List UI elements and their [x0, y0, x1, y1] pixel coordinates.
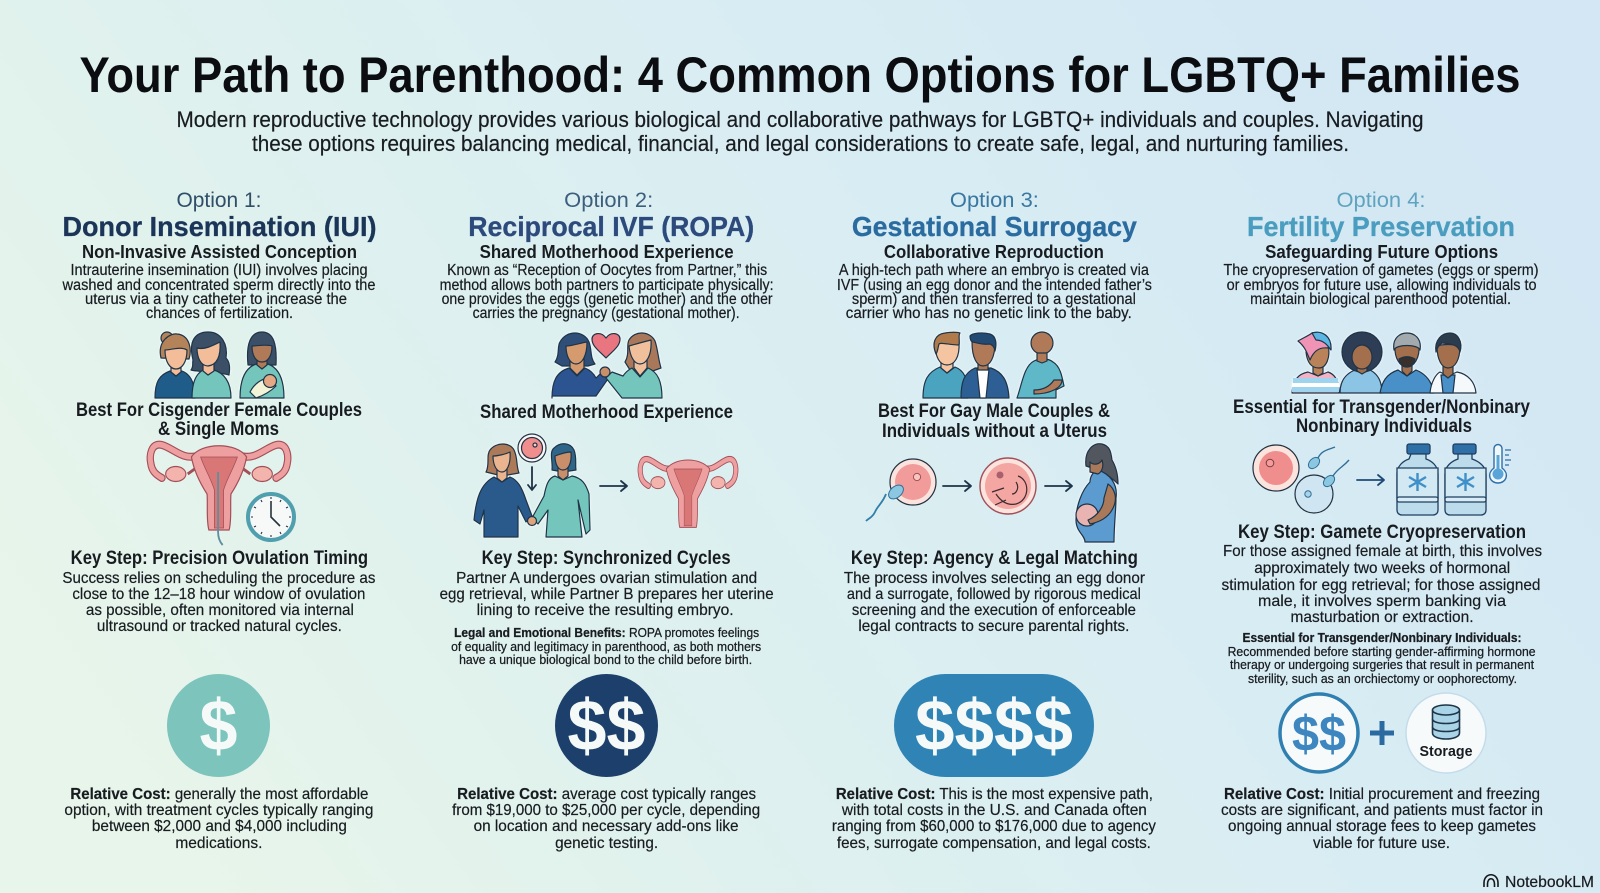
- icon: clock: [248, 494, 294, 540]
- option 1 subheading: Non-Invasive Assisted Conception: [82, 242, 357, 262]
- key step description: For those assigned female at birth, this involves: [1223, 543, 1542, 560]
- illustration: sperm egg embryo surrogate: [866, 444, 1118, 542]
- key step heading: Key Step: Synchronized Cycles: [482, 548, 731, 569]
- relative cost text: genetic testing.: [555, 835, 658, 852]
- relative cost text: option, with treatment cycles typically ranging: [64, 802, 373, 819]
- essential for text: Essential for Transgender/Nonbinary: [1233, 397, 1530, 418]
- key step description: male, it involves sperm banking via: [1258, 593, 1506, 610]
- option 3 description: [837, 262, 1152, 322]
- relative cost text: with total costs in the U.S. and Canada often: [841, 802, 1147, 819]
- notebooklm logo: NotebookLM: [1505, 874, 1594, 891]
- relative cost text: Relative Cost: average cost typically ranges: [457, 786, 756, 803]
- key step description: stimulation for egg retrieval; for those assigned: [1222, 577, 1540, 594]
- legal and emotional benefits: [451, 626, 761, 667]
- option 1 heading: Donor Insemination (IUI): [62, 211, 376, 242]
- best for text: & Single Moms: [158, 419, 279, 440]
- icon: two men and person: [923, 332, 1064, 398]
- option 2 description: carries the pregnancy (gestational mother).: [473, 305, 740, 322]
- essential for transgender note: Essential for Transgender/Nonbinary Individuals:: [1242, 631, 1522, 645]
- option 2 description: one provides the eggs (genetic mother) and the other: [442, 291, 773, 308]
- key step description: and a surrogate, followed by rigorous medical: [847, 586, 1141, 603]
- partners sharing egg: [474, 434, 590, 537]
- icon: storage circle: Storage: [1420, 743, 1472, 760]
- key step description: ultrasound or tracked natural cycles.: [97, 618, 342, 635]
- icon: uterus with catheter: [150, 445, 288, 545]
- best for text: [878, 401, 1110, 442]
- arrow down: [528, 467, 536, 490]
- key step description: [1222, 543, 1542, 626]
- panel: option 4 fertility preservation: [1221, 189, 1543, 852]
- best for text: Best For Gay Male Couples &: [878, 401, 1110, 422]
- icon: pregnant surrogate: [1076, 444, 1118, 542]
- subtitle: Modern reproductive technology provides various biological and collaborative pathways for LGBTQ+ individuals and couples. Navigating: [176, 107, 1424, 132]
- option 3 label: Option 3:: [950, 189, 1039, 212]
- subtitle: these options requires balancing medical, financial, and legal considerations to create safe, legal, and nurturing families.: [252, 131, 1349, 156]
- option 1 description: Intrauterine insemination (IUI) involves placing: [70, 262, 368, 279]
- essential for transgender note: Recommended before starting gender-affirming hormone: [1228, 645, 1536, 659]
- option 4 label: Option 4:: [1336, 189, 1426, 212]
- option 1 description: chances of fertilization.: [146, 305, 293, 322]
- relative cost text: costs are significant, and patients must factor in: [1221, 802, 1543, 819]
- relative cost text: viable for future use.: [1313, 835, 1450, 852]
- option 1 description: washed and concentrated sperm directly into the: [62, 277, 375, 294]
- best for text: Best For Cisgender Female Couples: [76, 400, 362, 421]
- icon: four dollar cost: $$$$: [915, 686, 1073, 766]
- icon: frozen vials: [1397, 444, 1486, 515]
- legal and emotional benefits: of equality and legitimacy in parenthood, as both mothers: [451, 640, 761, 654]
- option 2 label: Option 2:: [564, 189, 653, 212]
- option 4 description: maintain biological parenthood potential.: [1250, 291, 1511, 308]
- key step description: screening and the execution of enforceable: [852, 602, 1136, 619]
- option 3 heading: Gestational Surrogacy: [852, 211, 1137, 242]
- key step heading: Key Step: Agency & Legal Matching: [851, 548, 1138, 569]
- option 2 subheading: Shared Motherhood Experience: [480, 242, 734, 262]
- key step description: egg retrieval, while Partner B prepares her uterine: [440, 586, 774, 603]
- arrow: [1357, 475, 1384, 485]
- option 4 description: The cryopreservation of gametes (eggs or sperm): [1224, 262, 1538, 279]
- icon: one dollar cost: [167, 674, 270, 777]
- arrow: [1045, 481, 1072, 491]
- legal and emotional benefits: Legal and Emotional Benefits: ROPA promotes feelings: [454, 626, 759, 640]
- relative cost text: [452, 786, 760, 852]
- icon: uterus: [640, 459, 736, 527]
- icon: four dollar cost: [894, 674, 1094, 777]
- relative cost text: Relative Cost: Initial procurement and freezing: [1224, 786, 1540, 803]
- best for text: Individuals without a Uterus: [882, 421, 1107, 442]
- subtitle: [176, 107, 1424, 156]
- option 4 subheading: Safeguarding Future Options: [1265, 242, 1498, 262]
- relative cost text: fees, surrogate compensation, and legal costs.: [837, 835, 1151, 852]
- option 3 subheading: Collaborative Reproduction: [884, 242, 1104, 262]
- option 1 label: Option 1:: [176, 189, 262, 212]
- relative cost text: medications.: [175, 835, 262, 852]
- key step description: close to the 12–18 hour window of ovulation: [72, 586, 365, 603]
- essential for transgender note: [1228, 631, 1536, 686]
- option 2 description: method allows both partners to participate physically:: [440, 277, 774, 294]
- option 3 description: sperm) and then transferred to a gestational: [852, 291, 1136, 308]
- key step description: approximately two weeks of hormonal: [1254, 560, 1510, 577]
- essential for transgender note: sterility, such as an orchiectomy or oophorectomy.: [1248, 672, 1517, 686]
- icon: two dollar circle: $$: [1292, 706, 1346, 762]
- option 3 description: A high-tech path where an embryo is created via: [839, 262, 1149, 279]
- panel: option 3 gestational surrogacy: [832, 189, 1156, 852]
- panel: option 1 donor insemination: [62, 189, 376, 852]
- icon: four diverse people: [1292, 332, 1476, 393]
- option 2 heading: Reciprocal IVF (ROPA): [468, 211, 754, 242]
- option 3 description: IVF (using an egg donor and the intended father’s: [837, 277, 1152, 294]
- option 2 description: [440, 262, 774, 322]
- illustration: partners with egg and uterus: [474, 434, 736, 537]
- icon: storage circle: [1406, 693, 1486, 773]
- icon: thermometer: [1490, 444, 1511, 483]
- key step description: The process involves selecting an egg donor: [844, 570, 1146, 587]
- icon: two dollar circle: [1280, 694, 1358, 772]
- relative cost text: on location and necessary add-ons like: [474, 818, 739, 835]
- option 4 description: or embryos for future use, allowing individuals to: [1227, 277, 1537, 294]
- icon: two dollar cost: $$: [568, 686, 646, 766]
- essential for text: Nonbinary Individuals: [1296, 416, 1472, 437]
- option 4 heading: Fertility Preservation: [1247, 211, 1515, 242]
- key step description: Success relies on scheduling the procedure as: [62, 570, 375, 587]
- icon: embryo: [980, 458, 1036, 514]
- icon: three women with baby: [155, 332, 284, 398]
- arrow right: [600, 481, 627, 491]
- icon: one dollar cost: $: [200, 686, 238, 766]
- key step description: [844, 570, 1146, 635]
- icon: plus: [1370, 721, 1394, 745]
- relative cost text: between $2,000 and $4,000 including: [92, 818, 347, 835]
- option 3 description: carrier who has no genetic link to the baby.: [846, 305, 1132, 322]
- option 4 description: [1224, 262, 1538, 308]
- relative cost text: from $19,000 to $25,000 per cycle, depending: [452, 802, 760, 819]
- best for text: Shared Motherhood Experience: [480, 402, 733, 423]
- key step description: as possible, often monitored via internal: [86, 602, 354, 619]
- key step heading: Key Step: Precision Ovulation Timing: [71, 548, 368, 569]
- relative cost text: Relative Cost: This is the most expensive path,: [836, 786, 1153, 803]
- essential for text: [1233, 397, 1530, 437]
- key step description: legal contracts to secure parental rights.: [858, 618, 1129, 635]
- key step heading: Key Step: Gamete Cryopreservation: [1238, 522, 1526, 543]
- icon: egg and sperm: [866, 459, 936, 521]
- panel: option 2 reciprocal IVF: [440, 189, 774, 852]
- essential for transgender note: therapy or undergoing surgeries that result in permanent: [1230, 658, 1534, 672]
- arrow: [943, 481, 971, 491]
- key step description: Partner A undergoes ovarian stimulation and: [456, 570, 757, 587]
- relative cost text: [64, 786, 373, 852]
- illustration: gametes to frozen vials: [1253, 444, 1511, 515]
- legal and emotional benefits: have a unique biological bond to the child before birth.: [459, 653, 752, 667]
- option 2 description: Known as “Reception of Oocytes from Partner,” this: [447, 262, 767, 279]
- relative cost text: [832, 786, 1156, 852]
- key step description: [62, 570, 375, 635]
- relative cost text: Relative Cost: generally the most affordable: [70, 786, 368, 803]
- key step description: [440, 570, 774, 619]
- icon: couple holding hands with heart: [552, 333, 662, 398]
- relative cost text: ongoing annual storage fees to keep gametes: [1228, 818, 1536, 835]
- icon: eggs and sperm: [1253, 445, 1349, 513]
- relative cost text: [1221, 786, 1543, 852]
- option 1 description: [62, 262, 375, 322]
- icon: two dollar cost: [555, 674, 658, 777]
- key step description: masturbation or extraction.: [1290, 609, 1474, 626]
- option 1 description: uterus via a tiny catheter to increase the: [85, 291, 347, 308]
- relative cost text: ranging from $60,000 to $176,000 due to agency: [832, 818, 1156, 835]
- best for text: [76, 400, 362, 440]
- key step description: lining to receive the resulting embryo.: [477, 602, 734, 619]
